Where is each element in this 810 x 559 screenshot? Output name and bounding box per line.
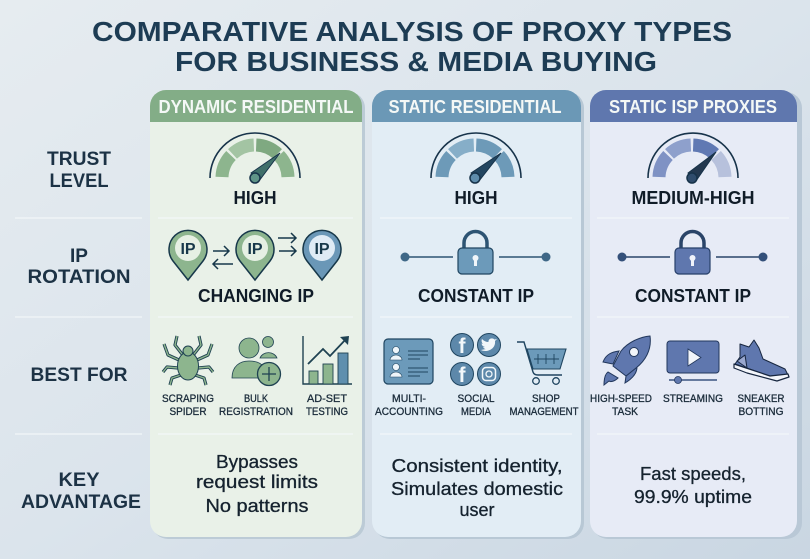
icon: social media: f [458, 364, 466, 387]
header: static residential [372, 90, 581, 122]
label: bulk registration [219, 393, 293, 418]
label: streaming: STREAMING [663, 393, 723, 405]
value: medium-high: MEDIUM-HIGH [632, 188, 754, 208]
icon: IP pin 3: IP [314, 241, 330, 258]
icon: streaming video [667, 341, 719, 384]
label: social media: SOCIAL [458, 393, 494, 405]
icon: ad-set testing chart [303, 336, 352, 384]
key advantage: dynamic residential [196, 452, 318, 516]
header: dynamic residential: DYNAMIC RESIDENTIAL [158, 97, 354, 117]
value: changing IP: CHANGING IP [198, 286, 314, 306]
label: ad-set testing: TESTING [306, 406, 348, 418]
icon: lock connection static ISP [618, 232, 768, 274]
label: high-speed task: HIGH-SPEED [590, 393, 652, 405]
key advantage: dynamic residential: No patterns [206, 496, 308, 516]
row label: key advantage: KEY [58, 470, 100, 491]
label: social media [458, 393, 494, 418]
arrows between pins 1 and 2 [213, 246, 233, 269]
title [92, 16, 732, 77]
key advantage: static ISP: 99.9% uptime [634, 487, 752, 507]
icon: IP pin 1 [169, 230, 207, 280]
panel: static residential [372, 90, 584, 539]
label: multi-accounting: MULTI- [392, 393, 426, 405]
label: high-speed task [590, 393, 652, 418]
row label: trust level: LEVEL [50, 171, 109, 192]
label: sneaker botting: SNEAKER [738, 393, 785, 405]
label: scraping spider: SCRAPING [162, 393, 214, 405]
header: static ISP proxies: STATIC ISP PROXIES [609, 97, 777, 117]
row label: key advantage: ADVANTAGE [21, 492, 141, 513]
key advantage: static ISP: Fast speeds, [640, 464, 746, 484]
row label: best for: BEST FOR [30, 365, 128, 386]
icon: multi-accounting card [384, 339, 433, 384]
label: bulk registration: REGISTRATION [219, 406, 293, 418]
icon: lock connection static residential [400, 232, 550, 274]
icon: social media: f [458, 335, 466, 358]
icon: social media [450, 334, 500, 387]
header: static ISP proxies [590, 90, 797, 122]
label: social media: MEDIA [461, 406, 492, 418]
label: ad-set testing: AD-SET [307, 393, 347, 405]
row label: trust level [47, 149, 111, 192]
value: constant IP: CONSTANT IP [418, 286, 534, 306]
label: bulk registration: BULK [244, 393, 269, 405]
icon: gauge static residential [431, 133, 521, 183]
icon: gauge static ISP [648, 133, 738, 183]
key advantage: static residential: Simulates domestic [391, 479, 563, 499]
value: high: HIGH [234, 188, 276, 208]
label: scraping spider: SPIDER [170, 406, 207, 418]
header: dynamic residential [150, 90, 362, 122]
value: constant IP: CONSTANT IP [635, 286, 751, 306]
arrows between pins 2 and 3 [278, 233, 296, 256]
key advantage: static residential: user [460, 500, 495, 520]
label: sneaker botting: BOTTING [738, 406, 784, 418]
icon: IP pin 2 [236, 230, 274, 280]
icon: IP pin 3 [303, 230, 341, 280]
value: high: HIGH [454, 188, 498, 208]
key advantage: dynamic residential: request limits [196, 472, 318, 492]
title: FOR BUSINESS & MEDIA BUYING [175, 46, 657, 77]
icon: gauge dynamic residential [210, 133, 300, 183]
panel: dynamic residential [150, 90, 365, 539]
label: multi-accounting: ACCOUNTING [375, 406, 443, 418]
icon: shopping cart [517, 342, 566, 384]
header: static residential: STATIC RESIDENTIAL [388, 97, 562, 117]
label: ad-set testing [306, 393, 348, 418]
icon: spider [163, 336, 213, 385]
key advantage: static ISP [634, 464, 752, 507]
panel: static ISP proxies [590, 90, 802, 539]
icon: IP pin 2: IP [247, 241, 263, 258]
icon: sneaker [734, 340, 789, 381]
icon: IP pin 1: IP [180, 241, 196, 258]
title: COMPARATIVE ANALYSIS OF PROXY TYPES [92, 16, 732, 47]
key advantage: static residential: Consistent identity, [392, 456, 562, 476]
label: shop management: MANAGEMENT [510, 406, 579, 418]
icon: rocket [603, 336, 650, 385]
row label: IP rotation: ROTATION [28, 267, 130, 288]
row label: IP rotation [28, 246, 130, 288]
label: scraping spider [162, 393, 214, 418]
label: multi-accounting [375, 393, 443, 418]
label: shop management: SHOP [532, 393, 560, 405]
label: high-speed task: TASK [612, 406, 639, 418]
icon: bulk registration [232, 336, 280, 386]
label: sneaker botting [738, 393, 785, 418]
key advantage: static residential [391, 456, 563, 520]
row label: IP rotation: IP [70, 246, 88, 267]
row label: key advantage [21, 470, 141, 513]
key advantage: dynamic residential: Bypasses [216, 452, 298, 472]
row label: trust level: TRUST [47, 149, 111, 170]
label: shop management [510, 393, 579, 418]
